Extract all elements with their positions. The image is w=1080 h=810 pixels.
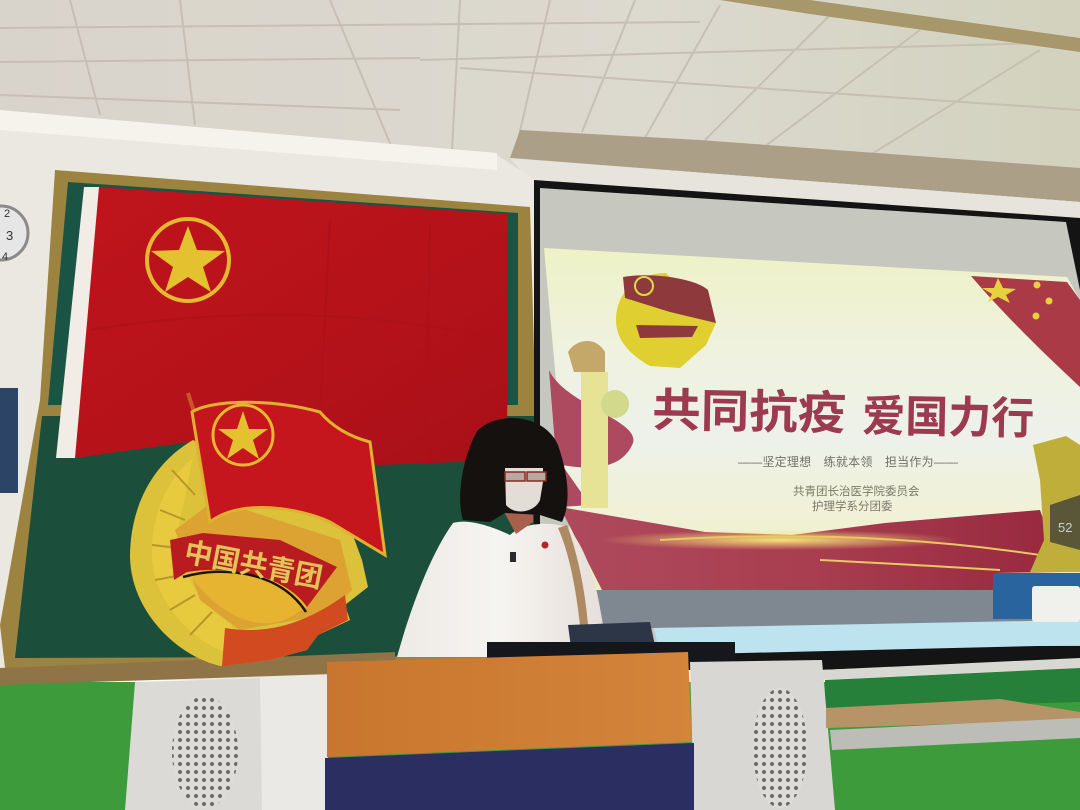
wall clock: 3 [6, 228, 13, 243]
lectern [325, 652, 694, 810]
screen housing strip [510, 158, 1080, 220]
slide badge [616, 273, 716, 368]
green desk [0, 682, 1080, 810]
ceiling beam [720, 0, 1080, 52]
slide presenter [793, 484, 920, 513]
slide [544, 248, 1080, 590]
slide presenter: 共青团长治医学院委员会 [793, 484, 920, 498]
screen housing soffit [510, 130, 1080, 202]
slide pillar [549, 341, 633, 508]
slide lion [1030, 436, 1080, 572]
wall clock [0, 206, 28, 263]
side desk [826, 699, 1080, 750]
slide subtitle: ——坚定理想 练就本领 担当作为—— [738, 454, 958, 469]
wall [0, 112, 535, 680]
board ledge [0, 652, 395, 685]
wall notice strip [0, 388, 18, 493]
ceiling [0, 0, 1080, 170]
slide title: 共同抗疫 [652, 384, 847, 439]
chalkboard [0, 170, 536, 668]
screen grey band [596, 573, 1080, 628]
slide flag corner [971, 276, 1080, 387]
slide title: 爱国力行 [862, 392, 1035, 444]
league badge: 中国共青团 [182, 536, 325, 594]
desktop taskbar [654, 620, 1080, 655]
flag emblem [147, 219, 229, 301]
lectern speakers [125, 660, 835, 810]
presenter [397, 418, 602, 657]
league badge [130, 393, 385, 666]
desktop window [993, 573, 1080, 622]
wall clock: 4 [2, 251, 8, 263]
right wall strip [820, 658, 1080, 680]
wall clock: 2 [4, 208, 10, 220]
slide red wave [560, 507, 1062, 590]
slide presenter: 护理学系分团委 [812, 499, 893, 513]
monitor on lectern [487, 622, 735, 662]
slide title [652, 384, 1035, 444]
projector screen [534, 180, 1080, 670]
slide lion: 52 [1058, 520, 1072, 535]
red league flag [56, 187, 508, 465]
